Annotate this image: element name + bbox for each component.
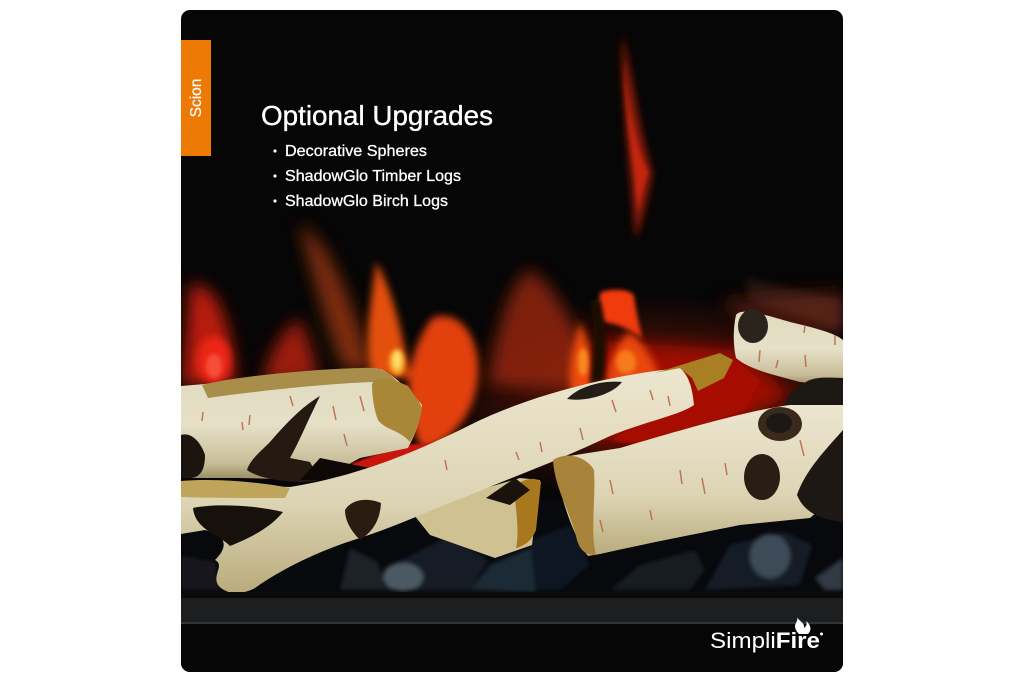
upgrades list xyxy=(274,143,461,210)
tab: Scion label xyxy=(181,40,211,156)
logo registered mark xyxy=(820,632,823,636)
logo: SimpliFire xyxy=(710,617,823,653)
icon: logo flame xyxy=(795,617,810,634)
upgrades list: Decorative Spheres xyxy=(285,143,427,160)
lower dark coals xyxy=(181,524,843,592)
flames xyxy=(182,35,843,450)
panel: fireplace photo xyxy=(181,10,843,672)
left birch log xyxy=(181,368,422,482)
bottom trim xyxy=(181,592,843,672)
upgrades list: ShadowGlo Birch Logs xyxy=(285,193,448,210)
back centre log stub xyxy=(410,478,541,558)
back right birch log xyxy=(734,309,843,408)
front long birch branch xyxy=(181,353,733,593)
logo: SimpliFire: Simpli Fire xyxy=(710,628,820,653)
tab: Scion label: Scion xyxy=(188,79,205,117)
birch bark marks xyxy=(202,325,835,532)
front right birch log xyxy=(553,405,843,556)
heading: Optional Upgrades xyxy=(261,100,493,131)
red embers behind logs xyxy=(350,361,759,468)
upgrades list: ShadowGlo Timber Logs xyxy=(285,168,461,185)
